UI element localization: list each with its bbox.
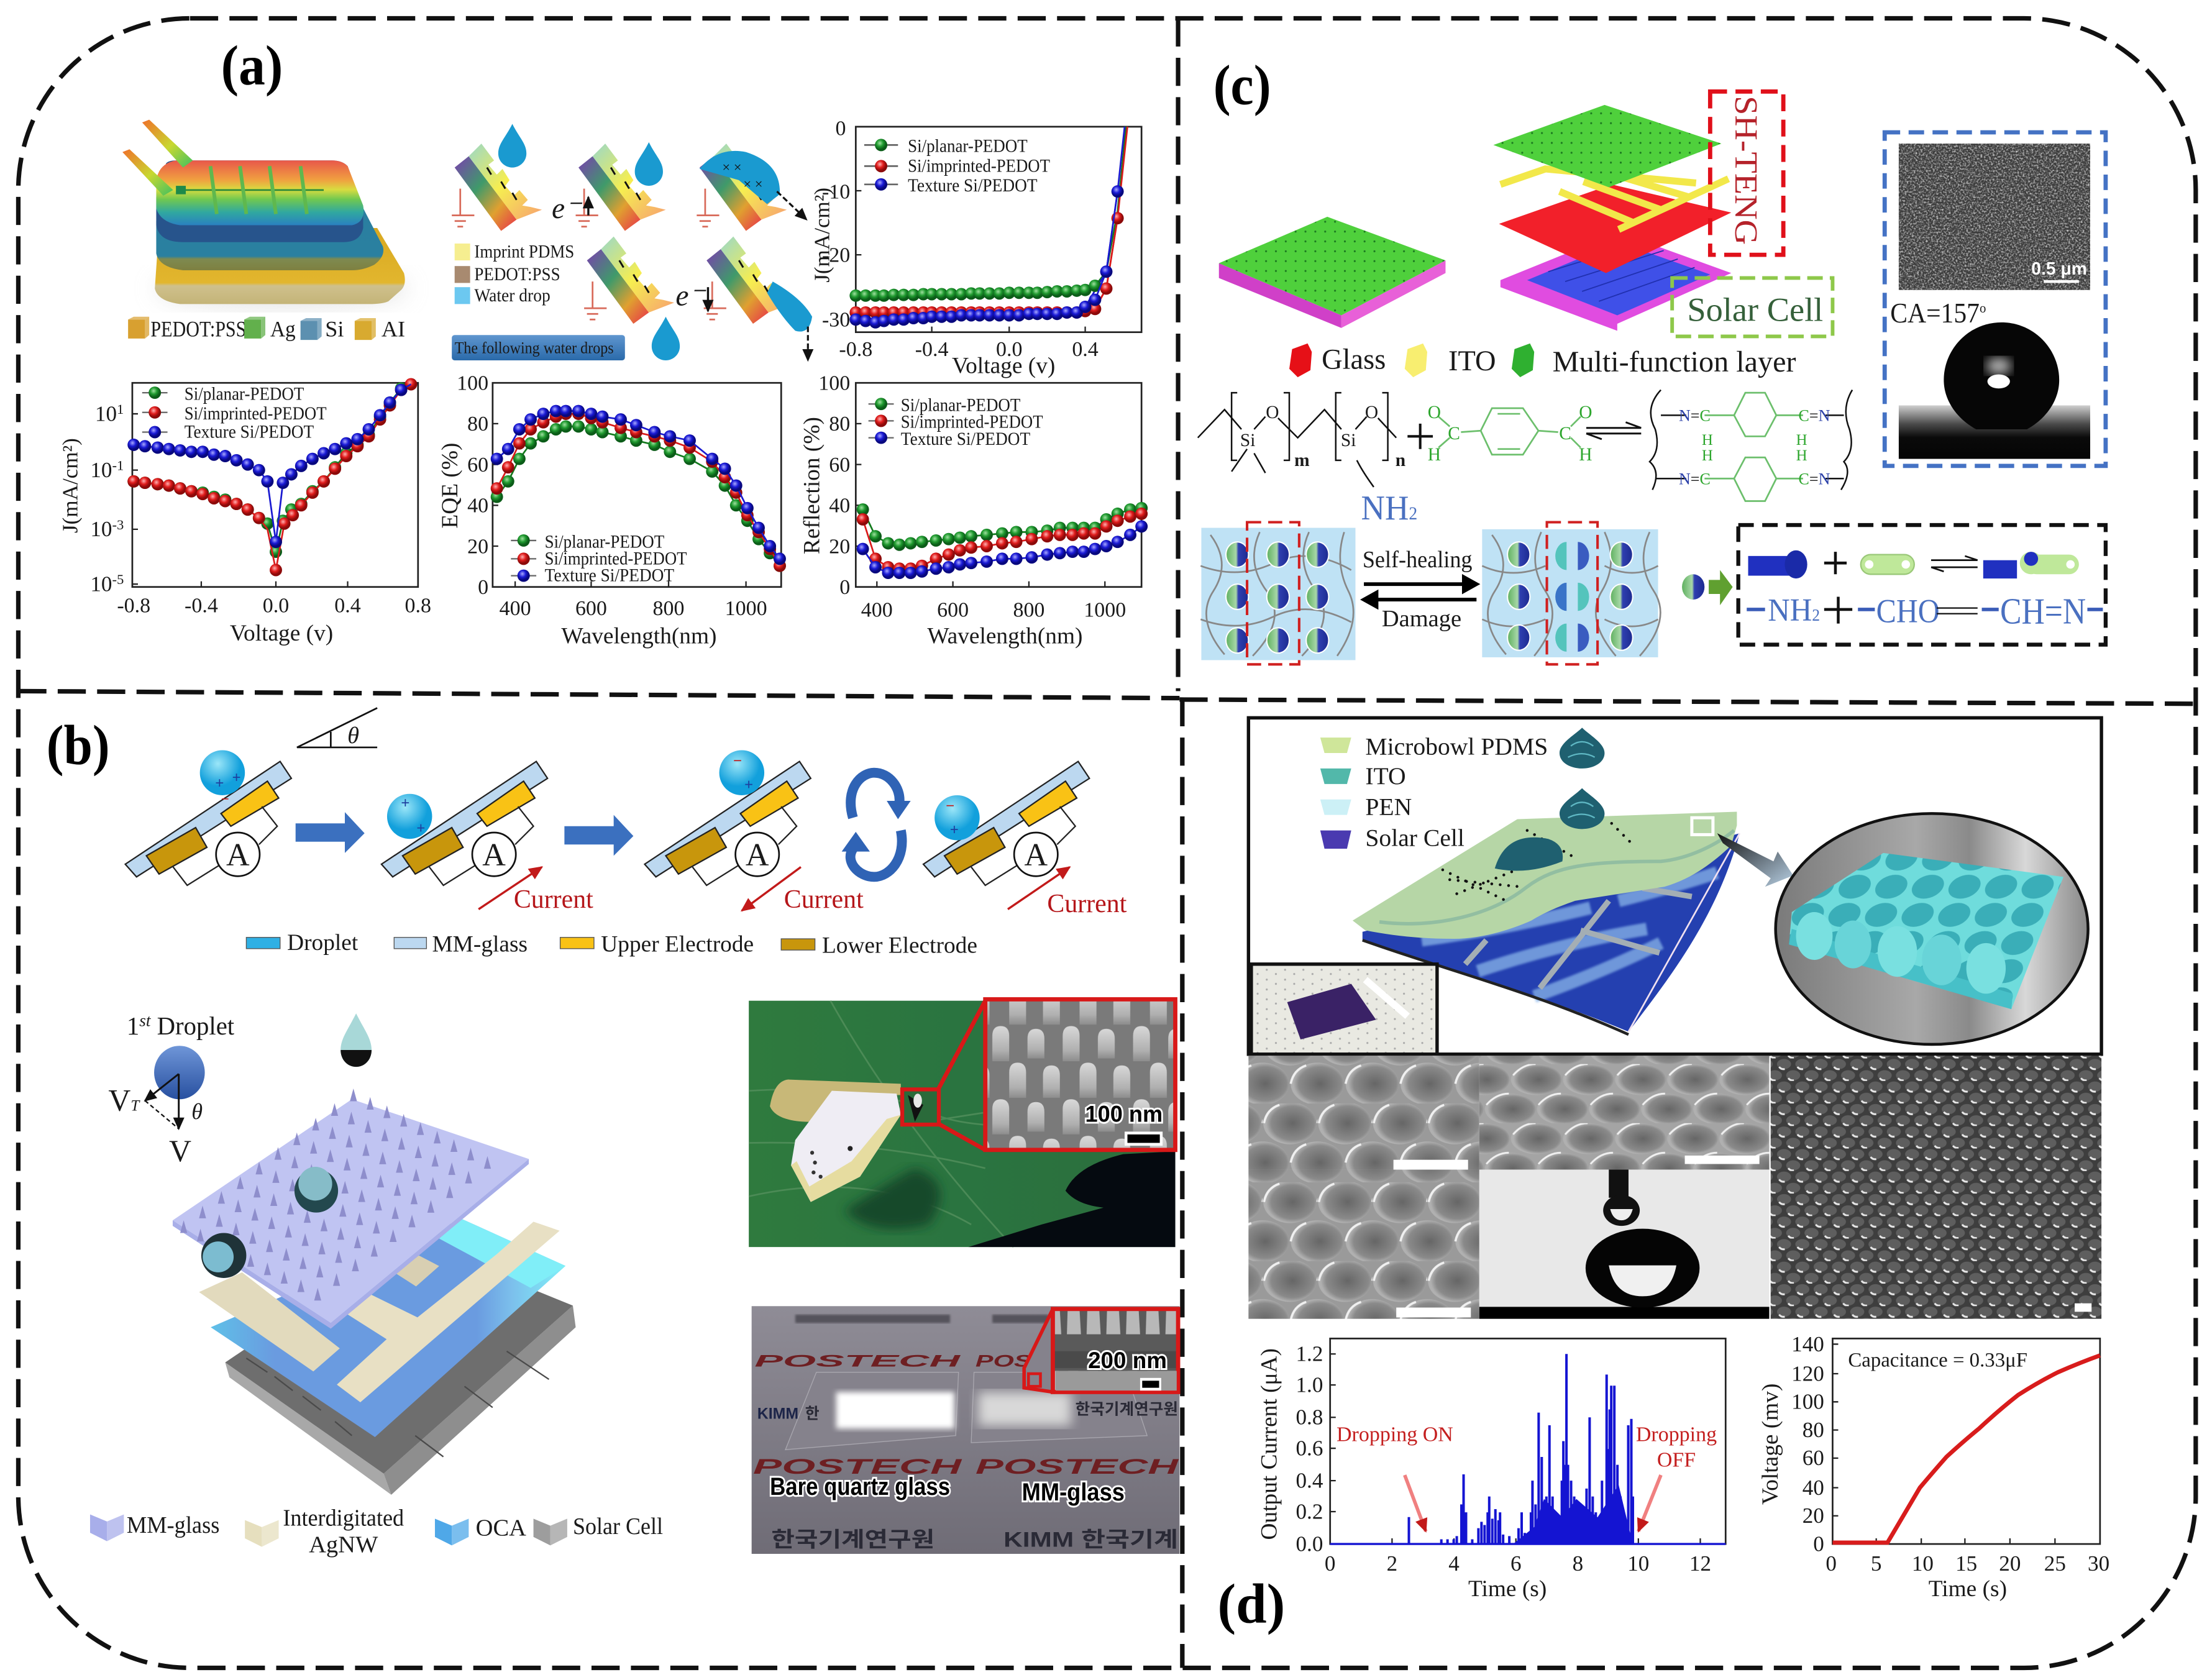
chart: EQE: EQE (%) xyxy=(437,443,463,529)
photo: quartz and MM-glass: POSTECH xyxy=(976,1455,1180,1479)
legend: schematic materials xyxy=(455,242,574,306)
chart: EQE: 800 xyxy=(653,597,684,620)
schematic: water drop charge cycle: e⁻ xyxy=(552,193,583,225)
schematic: water drop charge cycle: × × xyxy=(722,159,742,175)
device sequence: − xyxy=(733,752,742,769)
panel: d xyxy=(1217,718,2109,1635)
chart: reflection: Reflection (%) xyxy=(799,417,825,554)
chart: capacitor voltage: 60 xyxy=(1803,1446,1824,1470)
chart: J-V curve: -30 xyxy=(822,309,850,332)
diagram: first droplet velocity: θ xyxy=(191,1099,203,1124)
legend: layers: Glass xyxy=(1322,344,1386,376)
chart: J-V curve: 0.0 xyxy=(996,338,1022,361)
heading: (b): (b) xyxy=(47,714,110,777)
chart: reflection: 400 xyxy=(861,598,893,621)
heading: (c): (c) xyxy=(1213,54,1271,117)
legend: device parts: Upper Electrode xyxy=(601,931,754,957)
photo: quartz and MM-glass: KIMM 한국기계 xyxy=(1003,1528,1178,1552)
chart: reflection: 1000 xyxy=(1084,598,1126,621)
chart: capacitor voltage: Voltage (mv) xyxy=(1758,1384,1783,1505)
chart: capacitor voltage: 10 xyxy=(1912,1551,1934,1576)
chart: capacitor voltage: 0 xyxy=(1813,1532,1824,1556)
icon: tilt angle xyxy=(297,708,377,749)
chart: EQE: 400 xyxy=(500,597,531,620)
key: reversible bond xyxy=(1682,525,2106,645)
chart: J-V curve xyxy=(810,117,1141,378)
photo: quartz and MM-glass: MM-glass xyxy=(1022,1479,1125,1506)
chart: log J-V curve: 0.8 xyxy=(405,594,431,617)
chart: output current: 0.0 xyxy=(1295,1532,1323,1556)
chemical reaction scheme: O xyxy=(1266,403,1279,422)
legend: schematic materials: Imprint PDMS xyxy=(474,242,574,262)
chart: output current: 10 xyxy=(1627,1551,1649,1576)
chart: log J-V curve: -3 xyxy=(112,517,124,532)
schematic: water drop charge cycle: × × xyxy=(743,176,763,192)
chart: output current: 4 xyxy=(1448,1551,1460,1576)
device sequence: Current xyxy=(514,885,593,914)
inset: device photo xyxy=(1251,964,1437,1054)
chemical reaction scheme: N=C xyxy=(1679,470,1711,488)
chemical reaction scheme: H xyxy=(1796,432,1807,449)
chart: J-V curve: Si/imprinted-PEDOT xyxy=(908,156,1050,176)
chart: capacitor voltage: 15 xyxy=(1955,1551,1977,1576)
diagram: self-healing network: Self-healing xyxy=(1363,547,1473,573)
callout: following water drops xyxy=(452,335,625,360)
diagram: self-healing network: Damage xyxy=(1382,606,1461,632)
inset: SEM and contact angle: 0.5 μm xyxy=(2031,258,2087,278)
chart: J-V curve: -0.4 xyxy=(915,338,949,361)
chart: EQE: 20 xyxy=(467,535,488,558)
schematic: water drop charge cycle xyxy=(452,124,812,360)
chart: reflection: 100 xyxy=(818,372,850,395)
device sequence: − xyxy=(946,798,954,815)
callout: following water drops: The following water drops xyxy=(455,339,614,357)
legend: layers: Microbowl PDMS xyxy=(1365,733,1548,760)
chemical reaction scheme: H xyxy=(1796,447,1807,464)
chart: J-V curve: Texture Si/PEDOT xyxy=(908,176,1038,196)
chart: capacitor voltage: 120 xyxy=(1791,1361,1824,1386)
heading: (d): (d) xyxy=(1217,1573,1285,1635)
panel: a xyxy=(58,34,1141,649)
chart: log J-V curve: 10 xyxy=(90,572,112,596)
inset: SEM and contact angle xyxy=(1885,132,2106,466)
chart: EQE xyxy=(437,372,781,649)
key: reversible bond: CH=N xyxy=(2000,591,2086,632)
photo: quartz and MM-glass: POS xyxy=(976,1351,1031,1371)
chart: output current: 2 xyxy=(1387,1551,1397,1576)
photo: quartz and MM-glass: 200 nm xyxy=(1088,1347,1167,1373)
diagram: first droplet velocity: 1 xyxy=(127,1012,139,1040)
chart: EQE: Si/imprinted-PEDOT xyxy=(545,549,687,568)
callout: SH-TENG: SH-TENG xyxy=(1728,96,1763,245)
legend: materials: Ag xyxy=(270,316,296,341)
chart: reflection xyxy=(799,372,1141,649)
chart: EQE: 1000 xyxy=(725,597,767,620)
chart: log J-V curve: Voltage (v) xyxy=(230,621,333,646)
chart: log J-V curve: -0.4 xyxy=(185,594,218,617)
illustration frame: microbowl device xyxy=(1248,718,2101,1054)
chart: EQE: 80 xyxy=(467,413,488,436)
icon: tilt angle: θ xyxy=(347,723,359,749)
chemical reaction scheme: Si xyxy=(1341,431,1356,450)
diagram: first droplet velocity: st xyxy=(139,1011,152,1029)
chemical reaction scheme: C=N xyxy=(1799,470,1830,488)
chart: reflection: Wavelength(nm) xyxy=(927,623,1082,649)
chart: output current: 0.8 xyxy=(1295,1405,1323,1430)
chart: capacitor voltage: 20 xyxy=(1999,1551,2021,1576)
chart: reflection: 800 xyxy=(1013,598,1044,621)
chart: log J-V curve: 0.0 xyxy=(263,594,289,617)
illustration: PEDOT stacked device xyxy=(122,120,408,308)
chart: log J-V curve xyxy=(58,383,431,646)
legend: device parts: Lower Electrode xyxy=(822,933,977,959)
legend: device parts: MM-glass xyxy=(432,931,528,957)
photo: quartz and MM-glass xyxy=(752,1306,1180,1554)
chart: reflection: 60 xyxy=(829,454,850,477)
chart: EQE: Si/planar-PEDOT xyxy=(545,532,664,552)
chart: EQE: Wavelength(nm) xyxy=(561,623,717,649)
chemical reaction scheme: O xyxy=(1365,403,1378,422)
chart: reflection: 40 xyxy=(829,495,850,518)
chart: J-V curve: 0 xyxy=(835,117,846,140)
legend: schematic materials: PEDOT:PSS xyxy=(474,265,560,285)
chart: output current: Output Current (μA) xyxy=(1257,1348,1282,1540)
chart: log J-V curve: Si/planar-PEDOT xyxy=(185,384,304,404)
diagram: first droplet velocity: Droplet xyxy=(150,1012,235,1040)
legend: device parts xyxy=(246,930,977,959)
chart: capacitor voltage: 0 xyxy=(1825,1551,1837,1576)
chemical reaction scheme: C xyxy=(1559,424,1571,444)
device sequence: − xyxy=(221,792,229,807)
photo: quartz and MM-glass: KIMM xyxy=(757,1405,798,1422)
photo: quartz and MM-glass: 한 xyxy=(805,1405,820,1422)
chemical reaction scheme: m xyxy=(1294,450,1310,470)
photo: moth on leaf: 100 nm xyxy=(1085,1101,1163,1127)
device sequence: Current xyxy=(784,885,864,914)
legend: materials: PEDOT:PSS xyxy=(150,316,246,341)
chart: log J-V curve: -5 xyxy=(112,572,124,587)
heading: (a): (a) xyxy=(221,34,283,97)
legend: stack layers: AgNW xyxy=(309,1532,378,1558)
photo: droplet contact angle xyxy=(1479,1170,1769,1319)
legend: materials xyxy=(128,316,405,341)
chart: J-V curve: Voltage (v) xyxy=(952,353,1055,378)
callout: SH-TENG xyxy=(1710,91,1783,255)
callout: Solar Cell xyxy=(1672,278,1832,336)
chemical reaction scheme: H xyxy=(1702,432,1713,449)
chart: capacitor voltage xyxy=(1758,1332,2109,1602)
chart: capacitor voltage: 25 xyxy=(2044,1551,2066,1576)
legend: stack layers: OCA xyxy=(476,1515,526,1541)
photo: quartz and MM-glass: 한국기계연구원 xyxy=(1076,1401,1178,1418)
chart: J-V curve: J(mA/cm²) xyxy=(810,188,834,283)
chart: output current: Dropping ON xyxy=(1337,1423,1453,1446)
chart: log J-V curve: 10 xyxy=(95,401,117,426)
chart: log J-V curve: -1 xyxy=(112,458,124,473)
chart: log J-V curve: 10 xyxy=(90,458,112,482)
legend: layers: Solar Cell xyxy=(1365,824,1464,852)
device sequence: + xyxy=(744,777,753,793)
legend: stack layers: MM-glass xyxy=(127,1512,219,1538)
diagram: self-healing network xyxy=(1200,522,1660,664)
chemical reaction scheme: C=N xyxy=(1799,406,1830,424)
chemical reaction scheme: H xyxy=(1428,445,1441,465)
chemical reaction scheme: H xyxy=(1702,447,1713,464)
chart: EQE: 40 xyxy=(467,495,488,518)
panel: b xyxy=(47,708,1180,1558)
SEM image grid xyxy=(1248,1056,2101,1319)
chart: output current: Time (s) xyxy=(1468,1576,1547,1602)
chart: capacitor voltage: 80 xyxy=(1803,1418,1824,1442)
legend: layers: ITO xyxy=(1365,762,1406,790)
chart: EQE: 600 xyxy=(575,597,607,620)
chart: capacitor voltage: 5 xyxy=(1871,1551,1881,1576)
schematic: water drop charge cycle: e⁻ xyxy=(675,280,706,313)
chart: log J-V curve: 1 xyxy=(117,401,124,417)
chart: output current: 0.6 xyxy=(1295,1436,1323,1460)
chart: log J-V curve: J(mA/cm²) xyxy=(58,438,83,533)
chart: J-V curve: -20 xyxy=(822,244,850,267)
chart: capacitor voltage: Capacitance = 0.33μF xyxy=(1848,1349,2027,1372)
device sequence: + xyxy=(232,770,241,787)
chart: output current: 0.4 xyxy=(1295,1468,1323,1492)
legend: materials: Si xyxy=(325,316,344,341)
photo: moth on leaf xyxy=(749,999,1176,1247)
chart: EQE: 60 xyxy=(467,454,488,477)
device sequence: Current xyxy=(1047,890,1127,918)
legend: stack layers xyxy=(90,1505,663,1558)
chart: output current: Dropping xyxy=(1636,1423,1717,1446)
chemical reaction scheme: O xyxy=(1579,403,1592,422)
chemical reaction scheme: NH2 xyxy=(1361,489,1417,527)
key: reversible bond: NH2 xyxy=(1768,593,1820,628)
legend: layers: ITO xyxy=(1448,345,1496,377)
photo: quartz and MM-glass: 한국기계연구원 xyxy=(771,1528,934,1552)
chart: capacitor voltage: 20 xyxy=(1803,1504,1824,1528)
illustration: exploded device stack xyxy=(173,1013,576,1495)
legend: layers: Multi-function layer xyxy=(1553,346,1796,378)
chart: J-V curve: -10 xyxy=(822,180,850,203)
inset: SEM and contact angle: o xyxy=(1980,300,1986,316)
chart: J-V curve: -0.8 xyxy=(839,338,872,361)
diagram: first droplet velocity: VT xyxy=(108,1083,140,1117)
chart: capacitor voltage: Time (s) xyxy=(1929,1576,2007,1602)
device sequence: + xyxy=(215,775,224,792)
chart: log J-V curve: Si/imprinted-PEDOT xyxy=(185,404,327,424)
photo: quartz and MM-glass: POSTECH xyxy=(753,1455,963,1479)
legend: stack layers: Interdigitated xyxy=(283,1505,404,1532)
chart: output current: 0.2 xyxy=(1295,1499,1323,1523)
chart: EQE: Texture Si/PEDOT xyxy=(545,566,674,586)
chart: capacitor voltage: 100 xyxy=(1791,1390,1824,1414)
chemical reaction scheme: Si xyxy=(1240,431,1255,450)
chemical reaction scheme: C xyxy=(1448,424,1460,444)
device sequence: + xyxy=(950,821,959,838)
chemical reaction scheme: N=C xyxy=(1679,406,1711,424)
legend: materials: AI xyxy=(382,316,405,341)
illustration: assembled device xyxy=(1219,217,1445,328)
chart: J-V curve: Si/planar-PEDOT xyxy=(908,137,1028,157)
chart: reflection: 0 xyxy=(839,576,850,599)
chart: log J-V curve: 10 xyxy=(90,517,112,541)
legend: stack layers: Solar Cell xyxy=(573,1513,663,1540)
device sequence: + xyxy=(401,795,410,811)
device sequence xyxy=(126,750,1127,918)
photo: quartz and MM-glass: POSTECH xyxy=(754,1351,962,1371)
chart: capacitor voltage: 140 xyxy=(1791,1332,1824,1356)
legend: schematic materials: Water drop xyxy=(474,286,551,306)
chart: capacitor voltage: 40 xyxy=(1803,1476,1824,1500)
chemical reaction scheme: n xyxy=(1396,450,1405,470)
chemical reaction scheme: O xyxy=(1428,403,1441,422)
chart: reflection: 20 xyxy=(829,535,850,558)
chart: J-V curve: 0.4 xyxy=(1072,338,1099,361)
chart: output current: 8 xyxy=(1573,1551,1583,1576)
legend: layers xyxy=(1289,344,1796,378)
chart: capacitor voltage: 30 xyxy=(2088,1551,2109,1576)
chart: output current: OFF xyxy=(1657,1449,1696,1472)
callout: Solar Cell: Solar Cell xyxy=(1687,291,1823,329)
chart: output current: 0 xyxy=(1325,1551,1335,1576)
chart: reflection: 80 xyxy=(829,413,850,436)
chart: EQE: 100 xyxy=(457,372,488,395)
chart: output current xyxy=(1257,1338,1725,1602)
panel: c xyxy=(1198,54,2106,664)
photo: quartz and MM-glass: Bare quartz glass xyxy=(770,1473,950,1500)
chemical reaction scheme: H xyxy=(1579,445,1592,465)
chart: output current: 1.2 xyxy=(1295,1342,1323,1366)
legend: layers xyxy=(1320,733,1548,852)
inset: SEM and contact angle: CA=157 xyxy=(1890,298,1988,329)
legend: device parts: Droplet xyxy=(287,930,359,956)
chart: reflection: 600 xyxy=(937,598,969,621)
diagram: first droplet velocity: V xyxy=(169,1134,191,1168)
illustration: exploded layers xyxy=(1493,105,1731,331)
chart: log J-V curve: 0.4 xyxy=(334,594,361,617)
key: reversible bond: CHO xyxy=(1876,592,1940,629)
legend: layers: PEN xyxy=(1365,793,1412,821)
device sequence: + xyxy=(416,820,425,837)
chemical reaction scheme xyxy=(1198,390,1852,527)
chart: output current: 1.0 xyxy=(1295,1372,1323,1397)
chart: log J-V curve: Texture Si/PEDOT xyxy=(185,422,314,442)
chart: log J-V curve: -0.8 xyxy=(117,594,150,617)
chart: reflection: Si/imprinted-PEDOT xyxy=(901,413,1043,432)
chart: output current: 6 xyxy=(1510,1551,1522,1576)
diagram: first droplet velocity xyxy=(108,1011,235,1168)
chart: output current: 12 xyxy=(1689,1551,1711,1576)
chart: EQE: 0 xyxy=(478,576,488,599)
chart: reflection: Si/planar-PEDOT xyxy=(901,396,1020,416)
chart: reflection: Texture Si/PEDOT xyxy=(901,429,1030,449)
